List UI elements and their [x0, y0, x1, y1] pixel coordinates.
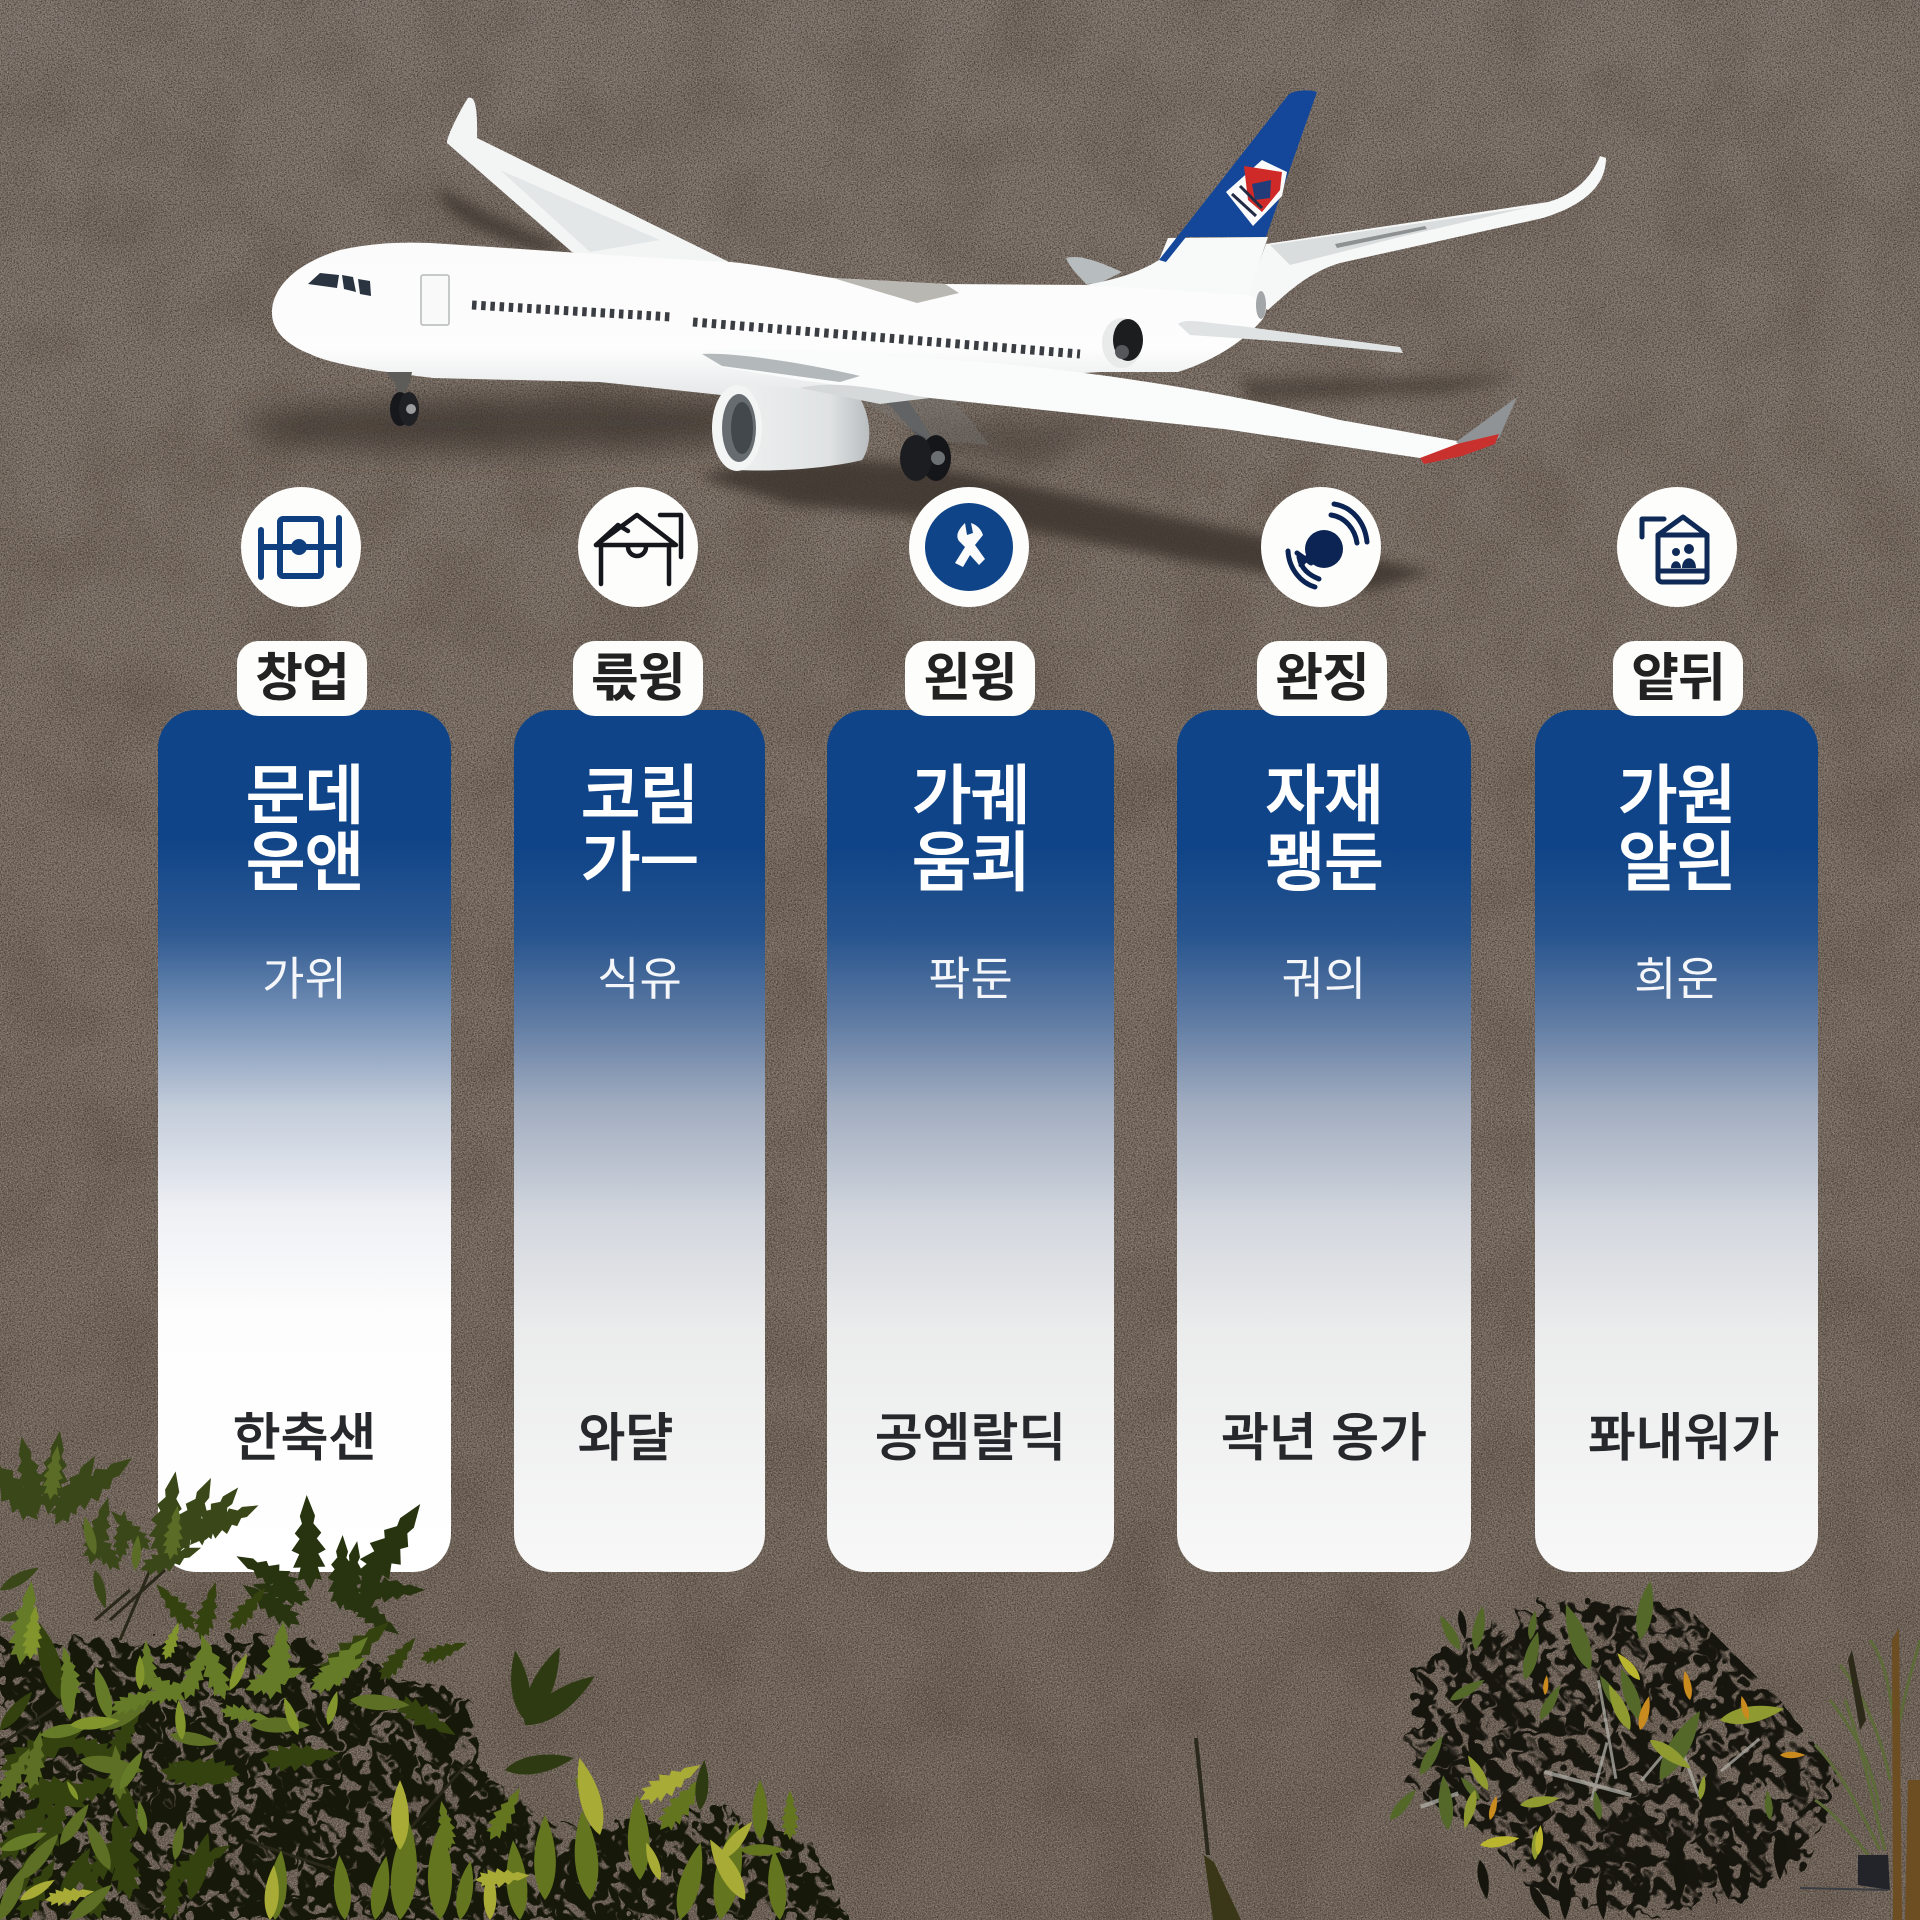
middle mid-green leaf band [0, 1577, 470, 1920]
card 2 [514, 710, 765, 1572]
card 1 [158, 710, 451, 1572]
cockpit windows [308, 273, 371, 296]
card 5 bottom label: 퐈내워가 [1588, 1410, 1779, 1468]
card 5 [1535, 710, 1818, 1572]
rear opening [1102, 291, 1266, 368]
card 5 title [1618, 759, 1735, 899]
right bush [1386, 1580, 1835, 1920]
card 3 [827, 710, 1114, 1572]
far upper-left leaf cluster [0, 1429, 264, 1624]
card 4 [1177, 710, 1471, 1572]
left bush dark mass [0, 1640, 850, 1920]
dark olive leaf upper right of bush [503, 1643, 711, 1811]
window rows [472, 305, 672, 317]
card 2 title: 코림 [581, 759, 698, 832]
card 3 title [912, 759, 1029, 899]
card 2 title: 가ㅡ [581, 826, 698, 899]
tail fin [1085, 90, 1317, 298]
card 2 subtitle: 식유 [597, 953, 682, 1005]
icon: circle 4 [1261, 487, 1381, 607]
card 2 title [581, 759, 698, 899]
left bush [0, 1429, 850, 1920]
card 4 title [1265, 759, 1383, 899]
card 3 title: 가궤 [912, 759, 1029, 832]
far wing [447, 98, 731, 263]
center blade [1194, 1738, 1241, 1920]
card 5 title: 알읜 [1618, 826, 1735, 899]
nose landing gear [386, 372, 419, 426]
icon: circle 3 [909, 487, 1029, 607]
badge 3: 왼윙 [923, 650, 1017, 708]
card 3 bottom label: 공엠랄딕 [875, 1410, 1066, 1468]
small stabilizer [1066, 257, 1122, 284]
card 1 subtitle: 가위 [262, 953, 347, 1005]
right bush dark mass [1410, 1600, 1835, 1920]
card 3 title: 움쾨 [912, 826, 1029, 899]
badge 1 [237, 641, 367, 716]
badge 4: 완징 [1275, 650, 1369, 708]
badge 5 [1613, 641, 1743, 716]
right-corner grass [1800, 1628, 1920, 1920]
tail logo [1226, 160, 1287, 226]
near tail stabilizer [1178, 321, 1403, 353]
near engine [712, 385, 869, 471]
card 4 title: 뫵둔 [1265, 826, 1383, 899]
card 1 title: 문데 [246, 759, 363, 832]
badge 2: 륷윙 [591, 650, 685, 708]
badge 1: 창업 [255, 650, 349, 708]
badge 5: 얕뒤 [1631, 650, 1725, 708]
door [421, 275, 449, 325]
card 3 subtitle: 팍둔 [928, 953, 1013, 1005]
card 1 bottom label: 한축샌 [233, 1410, 376, 1468]
fuselage [272, 243, 1266, 395]
card 1 title: 운앤 [246, 826, 363, 899]
near wing [698, 349, 1466, 458]
main landing gear [860, 395, 990, 481]
card 4 title: 자재 [1265, 759, 1383, 832]
card 5 subtitle: 희운 [1634, 953, 1719, 1005]
tail stabilizer far side [1245, 156, 1606, 310]
card 4 subtitle: 궈의 [1282, 953, 1366, 1005]
icon: circle 1 [241, 487, 361, 607]
wing fairing patch [833, 278, 959, 303]
card 5 title: 가원 [1618, 759, 1735, 832]
icon: circle 2 [578, 487, 698, 607]
shadow: ground shadows [237, 190, 1522, 590]
lower yellow-green leaves [266, 1768, 799, 1920]
winglet [1420, 397, 1517, 464]
card 2 bottom label: 와댤 [578, 1410, 673, 1468]
badge 4 [1257, 641, 1387, 716]
card 4 bottom label: 곽년 옹가 [1221, 1410, 1427, 1468]
badge 2 [573, 641, 703, 716]
icon: circle 5 [1617, 487, 1737, 607]
card 1 title [246, 759, 363, 899]
right-upper leaf cluster over card [230, 1493, 436, 1643]
badge 3 [905, 641, 1035, 716]
